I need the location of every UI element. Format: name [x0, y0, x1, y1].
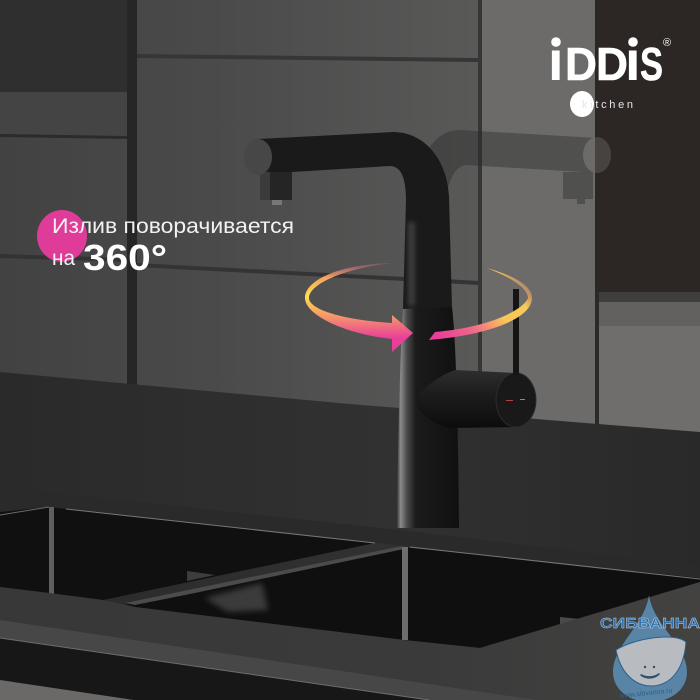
logo: iddis kitchen: i: [625, 29, 641, 92]
sink: left basin: [0, 507, 375, 600]
background: kitchen cabinets: [0, 0, 700, 460]
heading: на 360: на: [52, 247, 75, 270]
handle cap: [496, 373, 536, 427]
lever: [513, 289, 519, 375]
faucet: [244, 132, 536, 528]
watermark bath: [616, 637, 686, 686]
heading: spout rotates: Излив поворачивается: [52, 215, 294, 238]
faucet spout arm: [258, 132, 452, 309]
watermark face: [640, 666, 660, 679]
logo: iddis kitchen: i: [548, 29, 564, 92]
faucet body: [397, 307, 459, 528]
watermark: sibvanna: [600, 595, 700, 700]
pink accent circle: [37, 210, 87, 262]
rotation arrow: right arc: [429, 268, 532, 340]
spout end cap: [244, 139, 272, 175]
logo: iddis kitchen: kitchen: [582, 99, 633, 111]
logo: iddis kitchen: [548, 29, 671, 117]
ghost spout rotated position: [428, 130, 611, 204]
countertop: [0, 372, 700, 700]
rotation arrow: left arc: [305, 263, 413, 352]
spout outlet: [260, 172, 292, 205]
handle marks: [506, 399, 525, 401]
logo: iddis kitchen: S: [640, 38, 663, 90]
watermark name: СИБВАННА: [600, 615, 700, 632]
countertop front edge: [0, 582, 700, 700]
logo: iddis kitchen: D: [596, 38, 628, 90]
sink: right basin: [125, 546, 700, 648]
logo: iddis kitchen: D: [565, 38, 597, 90]
heading: на 360: 360°: [83, 237, 167, 278]
neck highlight: [408, 222, 415, 306]
handle cylinder: [417, 370, 516, 428]
heading: на 360: [52, 237, 167, 278]
watermark drop: [613, 595, 687, 700]
logo: iddis kitchen: ®: [663, 37, 671, 49]
watermark url: www.sibvanna.ru: [618, 687, 673, 700]
